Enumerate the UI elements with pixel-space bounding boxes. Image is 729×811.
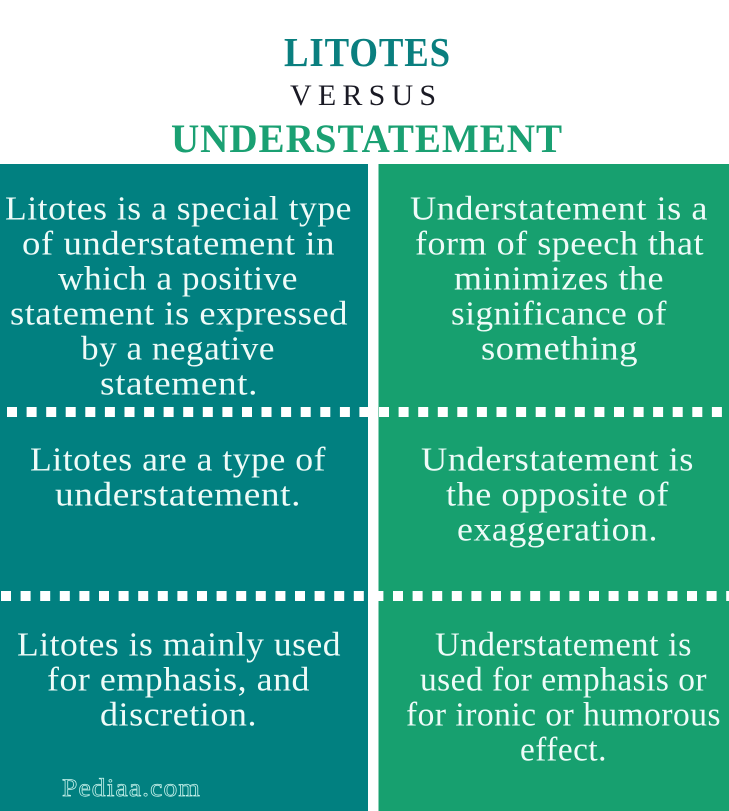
litotes category text: understatement. [55, 476, 301, 514]
understatement category text [421, 442, 694, 548]
litotes definition text: by a negative [81, 330, 275, 368]
understatement definition text: something [481, 330, 638, 368]
dotted divider 1 [7, 407, 722, 417]
litotes definition text: Litotes is a special type [5, 190, 352, 228]
litotes definition text: statement is expressed [10, 296, 348, 332]
litotes category text: Litotes are a type of [30, 442, 326, 478]
title block [171, 29, 563, 161]
understatement category text: Understatement is [421, 442, 694, 478]
understatement category text: the opposite of [446, 476, 669, 514]
understatement usage text [406, 626, 721, 768]
litotes usage text [17, 626, 341, 734]
understatement usage text: Understatement is [435, 626, 692, 664]
litotes usage text: discretion. [100, 696, 257, 734]
dotted divider 2 [1, 591, 729, 601]
subtitle: versus: VERSUS [290, 79, 436, 112]
understatement definition text: significance of [451, 296, 667, 332]
understatement definition text: minimizes the [454, 260, 664, 298]
litotes definition text: which a positive [58, 260, 298, 298]
litotes definition text: of understatement in [22, 226, 335, 262]
litotes category text [30, 442, 326, 514]
understatement definition text [410, 190, 708, 368]
understatement usage text: used for emphasis or [420, 662, 707, 698]
title: Understatement: UNDERSTATEMENT [171, 116, 563, 161]
litotes definition text [5, 190, 352, 402]
panel: understatement column [378, 164, 729, 811]
understatement category text: exaggeration. [457, 512, 658, 548]
understatement definition text: Understatement is a [410, 190, 708, 228]
panel: litotes column [0, 164, 368, 811]
logo: Pediaa.com: Pediaa.com [62, 775, 201, 802]
understatement usage text: effect. [520, 732, 607, 768]
litotes usage text: Litotes is mainly used [17, 626, 341, 664]
understatement definition text: form of speech that [415, 226, 704, 262]
litotes definition text: statement. [100, 366, 258, 402]
understatement usage text: for ironic or humorous [406, 696, 721, 734]
litotes usage text: for emphasis, and [47, 662, 310, 698]
title: Litotes: LITOTES [284, 29, 451, 75]
